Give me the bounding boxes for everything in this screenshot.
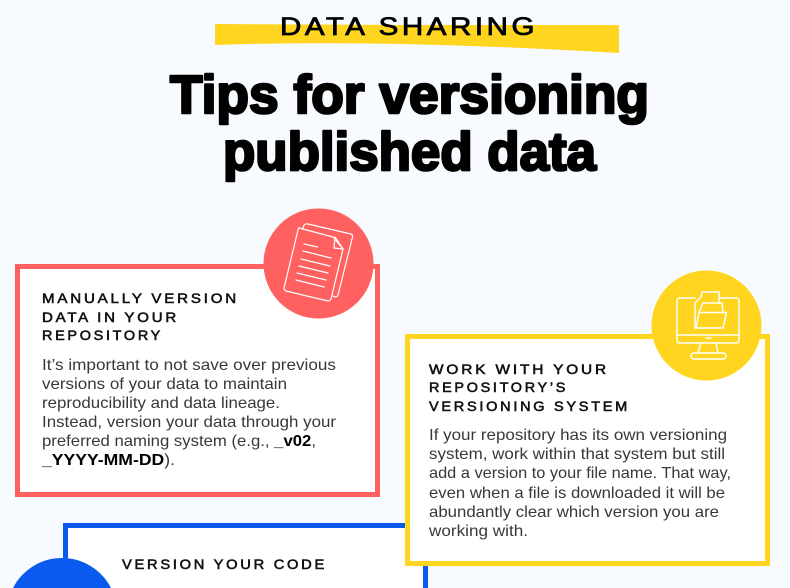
heading: manually version: MANUALLY VERSION xyxy=(42,291,239,306)
body text: repository versioning xyxy=(428,427,731,540)
body text: repository versioning: even when a file is downloaded it will be xyxy=(429,485,725,502)
title xyxy=(170,65,649,182)
heading: manually version xyxy=(42,291,239,343)
body text: repository versioning: working with. xyxy=(428,523,528,540)
body text: manual versioning: reproducibility and data lineage. xyxy=(42,395,280,412)
icon: blue circle xyxy=(13,558,111,588)
panel: version your code xyxy=(13,526,426,588)
body text: repository versioning: If your repository has its own versioning xyxy=(429,427,727,444)
heading: manually version: DATA IN YOUR xyxy=(42,310,179,325)
heading: work with your repository's versioning system xyxy=(429,362,630,414)
panel: repository versioning system xyxy=(408,270,768,564)
body text: manual versioning: It’s important to not save over previous xyxy=(42,357,336,374)
heading: work with your repository's versioning system: REPOSITORY’S xyxy=(429,380,568,395)
body text: repository versioning: add a version to your file name. That way, xyxy=(429,465,731,482)
body text: manual versioning: _YYYY-MM-DD ). xyxy=(41,452,175,469)
heading: version your code: VERSION YOUR CODE xyxy=(122,557,327,572)
body text: manual versioning: Instead, version your data through your xyxy=(42,414,337,431)
icon: documents xyxy=(264,208,374,318)
body text: manual versioning: versions of your data to maintain xyxy=(42,376,287,393)
body text: repository versioning: abundantly clear which version you are xyxy=(429,504,719,521)
body text: manual versioning: preferred naming system (e.g., _v02, xyxy=(42,433,316,450)
body text: manual versioning xyxy=(41,357,337,469)
panel frame: blue xyxy=(66,526,426,588)
icon: monitor with folder xyxy=(652,270,762,380)
title: published data xyxy=(223,122,597,182)
heading: work with your repository's versioning system: WORK WITH YOUR xyxy=(429,362,609,377)
panel frame: red xyxy=(18,266,378,494)
body text: repository versioning: system, work within that system but still xyxy=(429,446,725,463)
label highlight stroke xyxy=(215,24,619,53)
heading: manually version: REPOSITORY xyxy=(42,328,163,343)
section label: data sharing: DATA SHARING xyxy=(280,13,538,41)
title: Tips for versioning xyxy=(170,65,649,125)
panel frame: yellow xyxy=(408,336,768,564)
heading: work with your repository's versioning system: VERSIONING SYSTEM xyxy=(429,399,630,414)
panel: manually version data xyxy=(18,208,378,494)
